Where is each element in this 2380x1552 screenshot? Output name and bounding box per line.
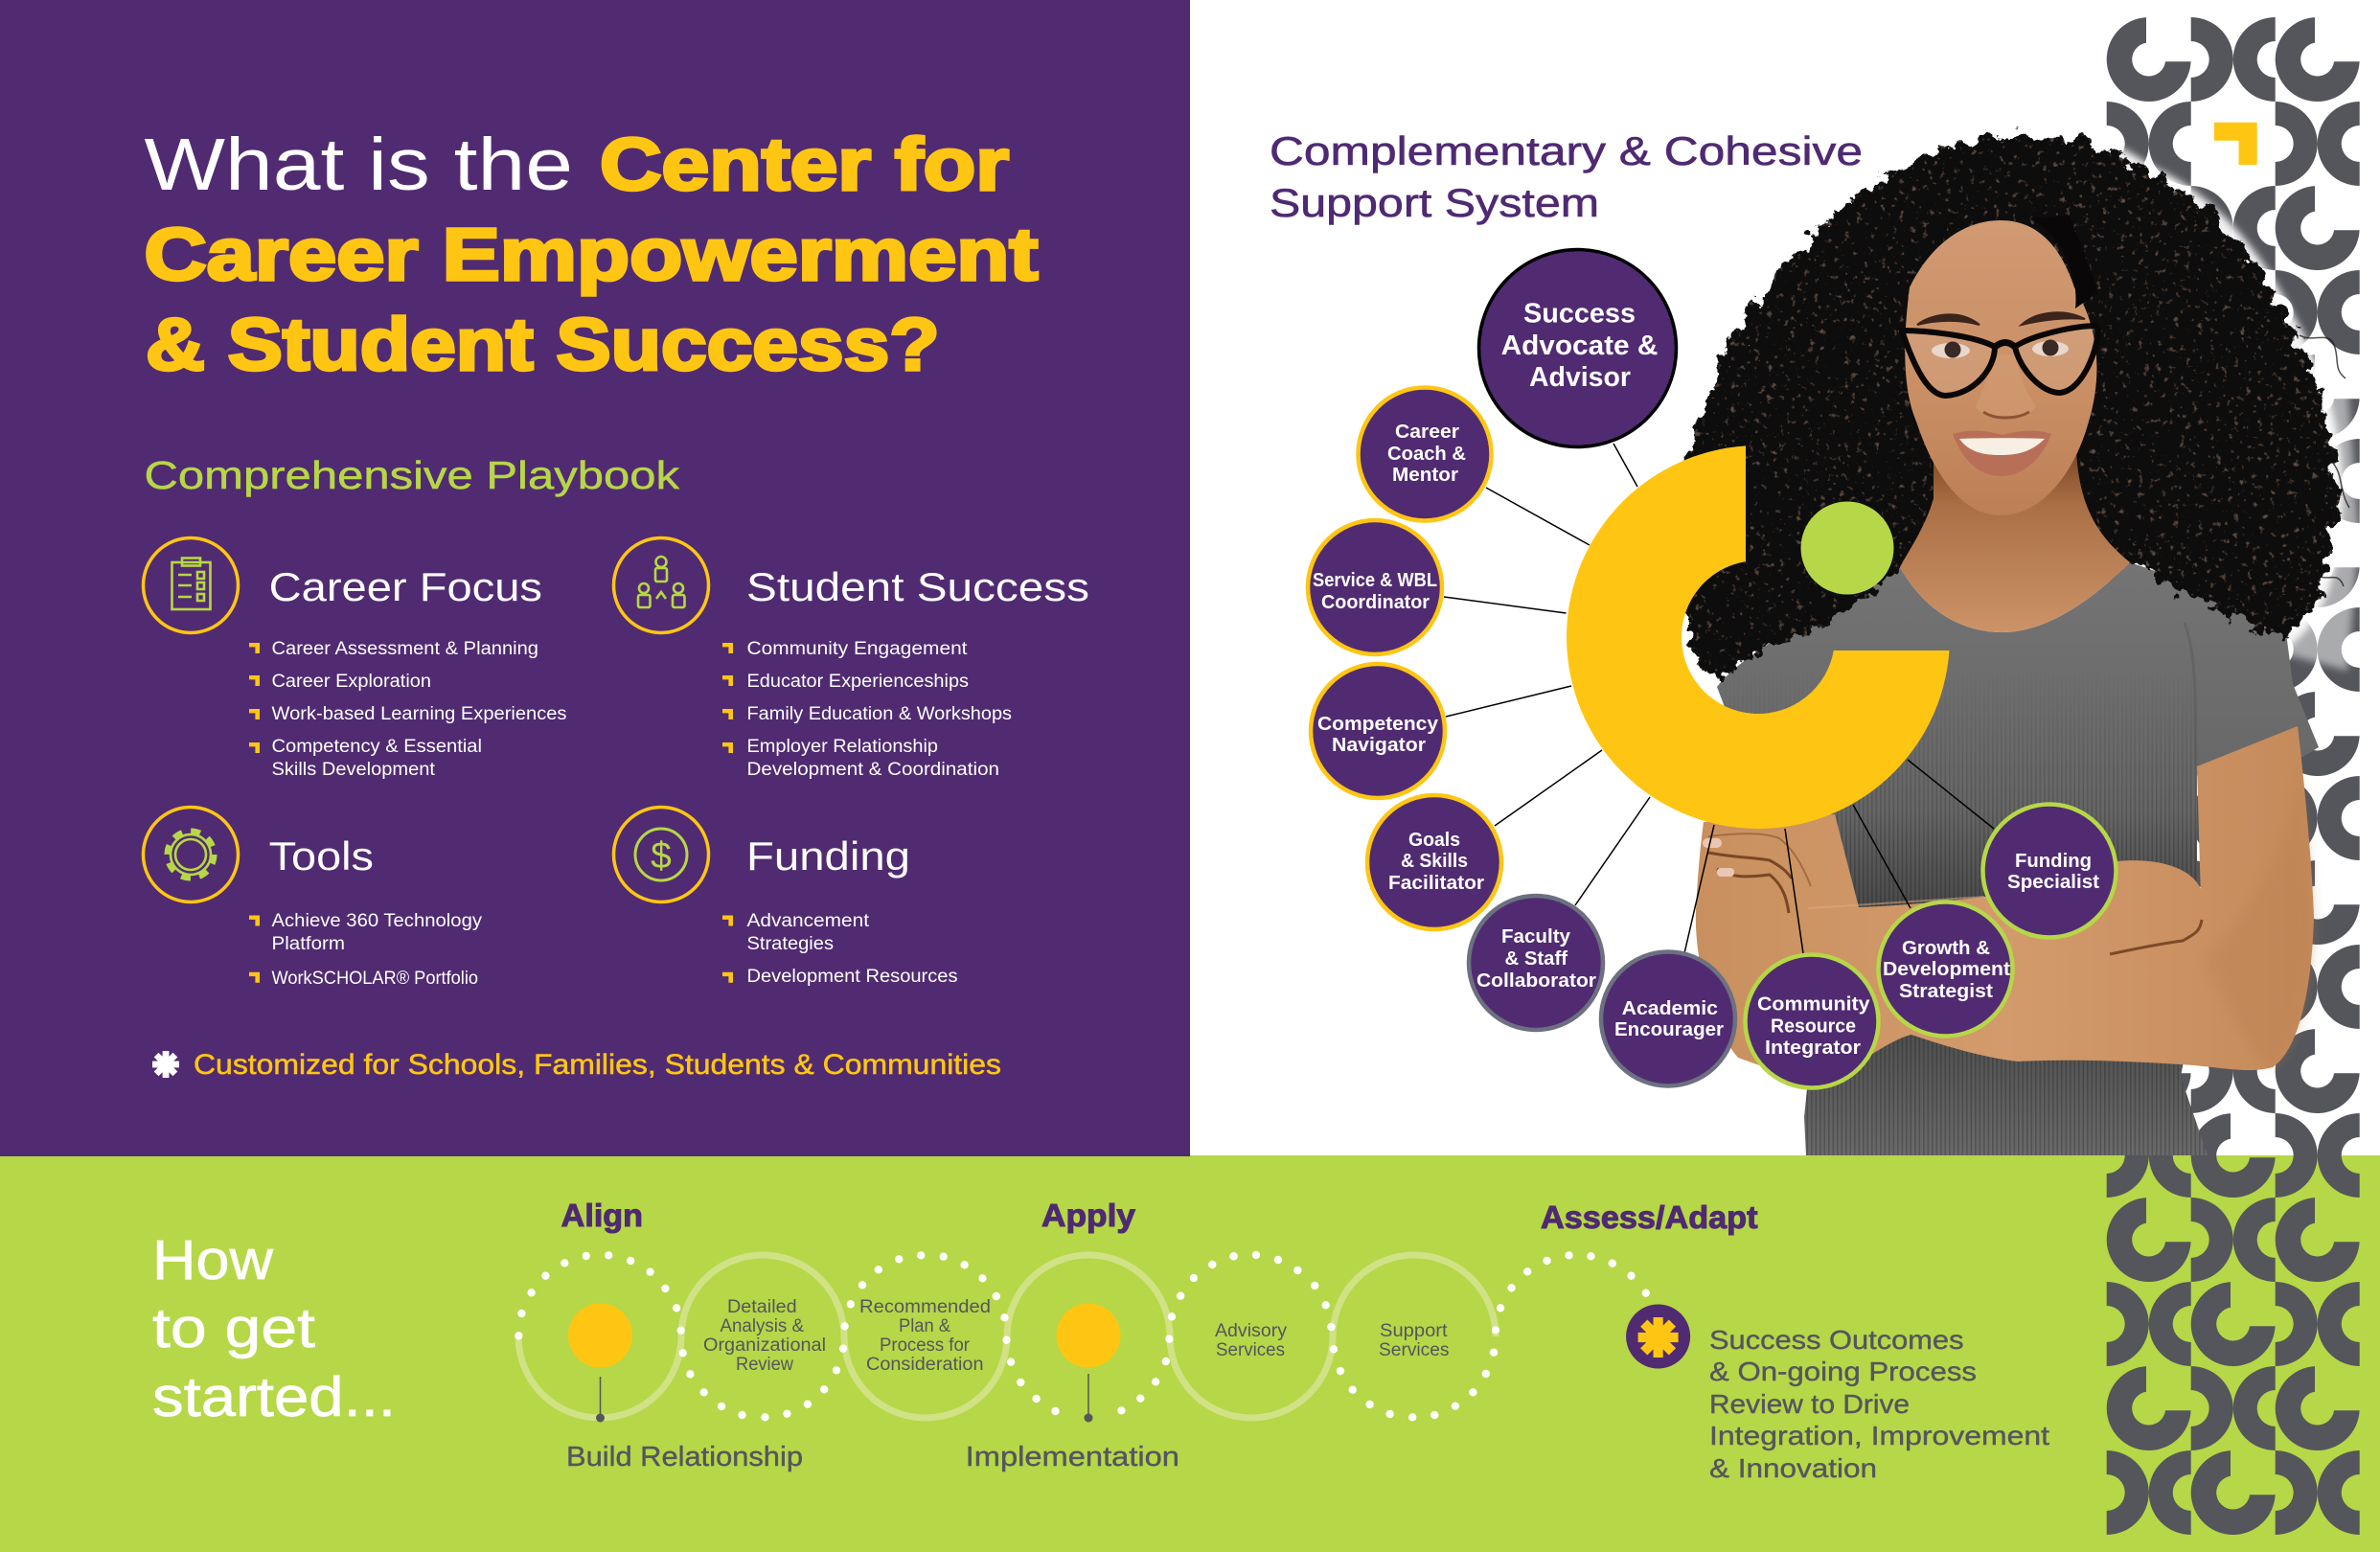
panel: purple intro [0, 0, 1190, 1156]
role: career coach: Mentor [1392, 464, 1458, 486]
role: goals facilitator: & Skills [1401, 850, 1468, 872]
icon: dollar coin [613, 807, 709, 902]
section: student success [613, 538, 1089, 780]
icon: yellow pattern chevron [2214, 123, 2257, 165]
title [144, 124, 1039, 386]
list: tools items: Achieve 360 Technology [272, 911, 483, 931]
step: recommended plan [859, 1297, 991, 1375]
role: service coordinator [1308, 520, 1442, 654]
role: community integrator [1746, 954, 1878, 1088]
step: advisory services: Advisory [1215, 1321, 1288, 1341]
heading: complementary support system [1270, 128, 1863, 225]
section: career focus [144, 538, 567, 780]
green how-to band [0, 1155, 2380, 1552]
step: recommended plan: Process for [880, 1335, 971, 1356]
list: tools items: Platform [272, 934, 345, 954]
step: detailed analysis: Analysis & [721, 1316, 804, 1336]
section: funding [613, 807, 958, 987]
text: success outcomes [1709, 1325, 2049, 1483]
step: detailed analysis [703, 1297, 826, 1375]
step captions: Implementation [966, 1442, 1179, 1472]
role: success advocate [1479, 249, 1677, 446]
role: career coach: Career [1395, 421, 1459, 443]
text: success outcomes: Integration, Improvement [1709, 1421, 2049, 1450]
heading: student success: Student Success [746, 564, 1089, 609]
stray hair curls [2300, 335, 2349, 586]
list: student success items: Educator Experienceships [747, 672, 969, 692]
role: success advocate: Advisor [1529, 362, 1631, 393]
icon: dollar coin: $ [651, 835, 672, 877]
list: student success items: Development & Coordination [747, 760, 999, 780]
role: community integrator: Community [1757, 993, 1870, 1016]
heading: how to get started: How [152, 1229, 274, 1291]
role: success advocate: Success [1523, 299, 1636, 330]
title: What is the [144, 124, 573, 206]
step: advisory services: Services [1216, 1340, 1285, 1360]
icon: gear [144, 807, 238, 902]
icon: people network [613, 538, 709, 632]
role: career coach: Coach & [1387, 443, 1466, 465]
step marker: apply [1056, 1303, 1121, 1422]
list: tools items [249, 911, 483, 989]
role: goals facilitator: Goals [1408, 829, 1460, 851]
list: career focus items: Career Assessment & Planning [272, 639, 538, 659]
section: tools [144, 807, 483, 989]
list: funding items: Advancement [747, 911, 870, 931]
role: growth strategist: Strategist [1899, 980, 1993, 1002]
role: goals facilitator [1367, 795, 1501, 929]
role: growth strategist: Growth & [1902, 937, 1990, 959]
step: detailed analysis: Review [736, 1355, 793, 1375]
role: academic encourager: Encourager [1614, 1018, 1724, 1040]
list: career focus items: Career Exploration [272, 672, 431, 692]
face [1902, 216, 2098, 515]
icon: clipboard [144, 538, 238, 632]
role: career coach [1359, 387, 1491, 521]
role: growth strategist: Development [1883, 958, 2010, 980]
text: success outcomes: & Innovation [1709, 1453, 1877, 1483]
role: community integrator: Resource [1771, 1016, 1856, 1037]
curly hair [1682, 135, 2335, 682]
neck and chest [1900, 450, 2130, 632]
callout: customized: Customized for Schools, Families, Students & Communities [194, 1049, 1001, 1081]
list: career focus items [249, 639, 567, 780]
list: tools items: WorkSCHOLAR® Portfolio [272, 969, 478, 989]
step: support services: Support [1380, 1321, 1448, 1341]
role: faculty collaborator [1469, 896, 1603, 1030]
photo: smiling woman with crossed arms [1682, 135, 2359, 1155]
icon: white asterisk [152, 1051, 179, 1078]
role: service coordinator: Coordinator [1321, 591, 1430, 613]
process wave: solid path [518, 1255, 1496, 1418]
heading: how to get started: started... [152, 1366, 396, 1428]
text: success outcomes: Success Outcomes [1709, 1325, 1964, 1355]
step marker: align [568, 1303, 632, 1422]
heading: funding: Funding [746, 833, 910, 879]
hair halo over pattern [2117, 144, 2360, 674]
title: & Student Success? [146, 304, 940, 386]
step: detailed analysis: Detailed [727, 1297, 797, 1317]
role: goals facilitator: Facilitator [1388, 872, 1484, 894]
heading: career focus: Career Focus [269, 564, 542, 609]
role: competency navigator [1311, 664, 1445, 798]
step captions: Build Relationship [566, 1442, 803, 1472]
role: academic encourager: Academic [1622, 997, 1718, 1019]
connector lines [1444, 444, 1994, 953]
role: growth strategist [1878, 902, 2012, 1037]
heading: how to get started [152, 1229, 396, 1428]
list: career focus items: Skills Development [272, 760, 436, 780]
list: funding items: Strategies [747, 934, 834, 954]
decorative pattern column [2107, 17, 2360, 1535]
step: recommended plan: Recommended [859, 1297, 991, 1317]
list: student success items [722, 639, 1012, 780]
role: funding specialist: Funding [2015, 850, 2092, 872]
role: competency navigator: Competency [1317, 713, 1439, 735]
list: career focus items: Work-based Learning Experiences [272, 704, 567, 724]
role: funding specialist [1983, 805, 2116, 937]
step: support services: Services [1379, 1340, 1449, 1360]
list: funding items: Development Resources [747, 967, 958, 987]
list: student success items: Community Engagement [747, 639, 968, 659]
title: Center for [600, 124, 1009, 206]
role: funding specialist: Specialist [2007, 871, 2099, 893]
icon: purple badge with asterisk [1626, 1305, 1690, 1368]
step: recommended plan: Consideration [866, 1355, 983, 1375]
role: faculty collaborator: Faculty [1501, 925, 1571, 947]
list: student success items: Family Education & Workshops [747, 704, 1012, 724]
step captions [566, 1442, 1179, 1472]
role: competency navigator: Navigator [1332, 734, 1426, 756]
step: detailed analysis: Organizational [703, 1335, 826, 1356]
heading: comprehensive playbook: Comprehensive Playbook [144, 453, 680, 497]
chart: yellow donut hub [1567, 445, 1949, 829]
heading: complementary support system: Complementary & Cohesive [1270, 128, 1863, 173]
t-shirt [1717, 562, 2319, 1155]
crossed arms [1696, 726, 2314, 1087]
role: community integrator: Integrator [1765, 1037, 1861, 1059]
step: support services [1379, 1321, 1449, 1360]
role: service coordinator: Service & WBL [1313, 569, 1437, 591]
stage labels: Apply [1041, 1198, 1136, 1233]
list: student success items: Employer Relationship [747, 737, 938, 757]
text: success outcomes: & On-going Process [1709, 1357, 1977, 1386]
role: faculty collaborator: Collaborator [1476, 970, 1596, 992]
list: funding items [722, 911, 958, 987]
stage labels [561, 1198, 1758, 1235]
role: faculty collaborator: & Staff [1504, 947, 1568, 970]
heading: how to get started: to get [152, 1297, 315, 1359]
title: Career Empowerment [144, 214, 1039, 296]
green dot [1801, 502, 1893, 594]
stage labels: Assess/Adapt [1541, 1199, 1757, 1235]
list: career focus items: Competency & Essential [272, 737, 482, 757]
role: academic encourager [1601, 952, 1735, 1086]
heading: tools: Tools [269, 833, 374, 879]
text: success outcomes: Review to Drive [1709, 1389, 1910, 1419]
stage labels: Align [561, 1198, 643, 1233]
step: advisory services [1215, 1321, 1288, 1360]
role: success advocate: Advocate & [1501, 331, 1658, 361]
heading: complementary support system: Support System [1270, 180, 1599, 225]
process wave: white dots [515, 1251, 1650, 1422]
step: recommended plan: Plan & [899, 1316, 950, 1336]
